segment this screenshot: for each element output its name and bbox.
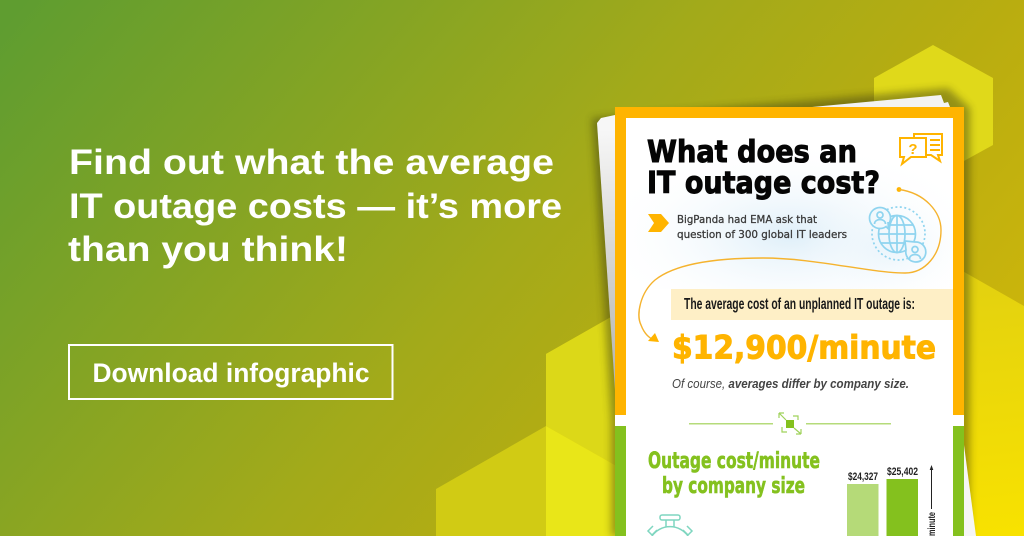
note text: Of course, averages differ by company size. bbox=[672, 377, 909, 391]
section heading bbox=[648, 449, 820, 499]
hexagon: overlap highlight bbox=[546, 426, 620, 536]
section heading: Outage cost/minute bbox=[648, 449, 820, 474]
back sheet right bbox=[964, 445, 976, 536]
icon: globe with users bbox=[870, 207, 926, 262]
back sheet top bbox=[812, 95, 950, 107]
bar: 25,402 bbox=[886, 479, 918, 536]
divider bbox=[689, 413, 891, 434]
headline line 3: than you think! bbox=[68, 229, 348, 269]
paper shadow bbox=[592, 88, 970, 536]
intro text: BigPanda had EMA ask that bbox=[677, 213, 818, 226]
axis arrow bbox=[930, 465, 933, 509]
green frame right bbox=[953, 426, 964, 536]
headline bbox=[68, 142, 562, 269]
hexagon: large centre bbox=[546, 194, 1024, 536]
hexagon: centre tint bbox=[546, 312, 620, 468]
card title: What does an bbox=[647, 135, 857, 170]
bar label: $24,327 bbox=[848, 471, 878, 483]
band text: The average cost of an unplanned IT outage is: bbox=[684, 296, 915, 313]
icon: speech bubbles: ? bbox=[908, 141, 918, 158]
button: download infographic: Download infographic bbox=[92, 358, 370, 388]
icon: expand arrows bbox=[779, 413, 801, 434]
intro text: question of 300 global IT leaders bbox=[677, 228, 847, 241]
bar: 24,327 bbox=[847, 484, 878, 536]
headline line 2: IT outage costs — it’s more bbox=[69, 186, 562, 226]
section heading: by company size bbox=[662, 474, 805, 499]
back sheet bbox=[597, 115, 615, 390]
blue wash bbox=[690, 188, 928, 282]
icon: chevron arrow bbox=[648, 214, 669, 232]
card paper bbox=[615, 107, 964, 536]
highlight band bbox=[671, 289, 953, 320]
hexagon: lower left bbox=[436, 426, 655, 536]
big number: $12,900/minute bbox=[672, 328, 936, 366]
curve arrow bbox=[639, 187, 941, 342]
icon: speech bubbles bbox=[900, 134, 942, 164]
button: download infographic bbox=[69, 345, 392, 399]
green frame left bbox=[615, 426, 626, 536]
axis label: minute bbox=[927, 512, 938, 536]
headline line 1: Find out what the average bbox=[69, 142, 554, 182]
card title: IT outage cost? bbox=[647, 166, 880, 201]
intro text bbox=[677, 213, 847, 241]
bar label: $25,402 bbox=[887, 466, 918, 478]
hexagon: top right bbox=[874, 45, 993, 178]
bar chart bbox=[847, 465, 938, 536]
card title bbox=[647, 135, 880, 201]
orange frame bbox=[615, 107, 964, 415]
stack of paper behind the infographic bbox=[592, 88, 976, 536]
infographic card bbox=[615, 107, 964, 536]
icon: stopwatch bbox=[648, 515, 692, 536]
